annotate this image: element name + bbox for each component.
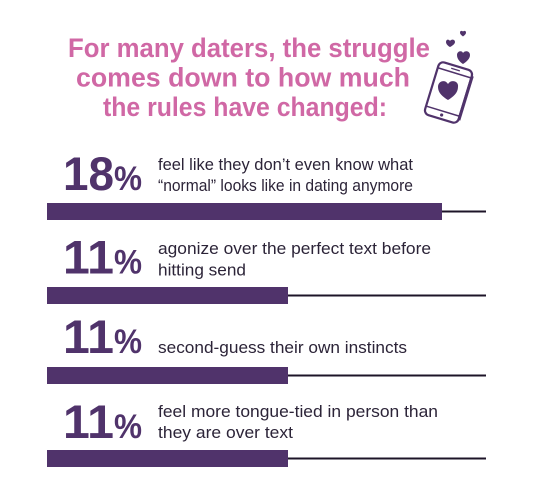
percentage: 11%: 11 xyxy=(63,395,114,448)
description: tongue-tied: feel more tongue-tied in person than xyxy=(158,403,438,421)
description: perfect text: agonize over the perfect text before xyxy=(158,240,431,258)
description: tongue-tied: they are over text xyxy=(158,424,293,442)
percentage: 11%: % xyxy=(114,323,142,361)
percentage: 11%: % xyxy=(114,408,142,446)
percentage: 18%: % xyxy=(114,160,142,198)
bar: instincts xyxy=(47,367,486,384)
percentage: 11% xyxy=(63,395,142,448)
description: instincts: second-guess their own instincts xyxy=(158,339,407,357)
percentage: 11%: 11 xyxy=(63,310,114,363)
percentage: 18% xyxy=(63,147,142,200)
title: comes down to how much xyxy=(76,62,410,92)
percentage: 18%: 18 xyxy=(63,147,114,200)
row: 18 percent xyxy=(47,147,486,220)
icon: large floating heart xyxy=(457,51,470,64)
bar: perfect text xyxy=(47,287,486,304)
description: 18%: feel like they don’t even know what xyxy=(158,156,413,174)
percentage: 11%: % xyxy=(114,244,142,282)
description: perfect text: hitting send xyxy=(158,262,246,280)
description: tongue-tied xyxy=(158,403,438,442)
icon: small floating heart xyxy=(460,31,466,36)
bar: 18% xyxy=(47,203,486,220)
row: 11 percent, instincts xyxy=(47,310,486,384)
row: 11 percent, perfect text xyxy=(47,230,486,304)
bar: tongue-tied xyxy=(47,450,486,467)
percentage: 11% xyxy=(63,230,142,284)
icon: phone with hearts xyxy=(424,31,474,124)
title: the rules have changed: xyxy=(103,92,387,122)
title: For many daters, the struggle xyxy=(68,33,430,63)
percentage: 11%: 11 xyxy=(63,230,114,284)
percentage: 11% xyxy=(63,310,142,363)
row: 11 percent, tongue-tied xyxy=(47,395,486,467)
description: perfect text xyxy=(158,240,431,280)
description: 18% xyxy=(158,156,413,195)
icon: medium floating heart xyxy=(446,40,455,47)
description: 18%: “normal” looks like in dating anymore xyxy=(158,177,413,195)
title xyxy=(68,33,430,122)
icon: heart on screen xyxy=(438,81,458,100)
